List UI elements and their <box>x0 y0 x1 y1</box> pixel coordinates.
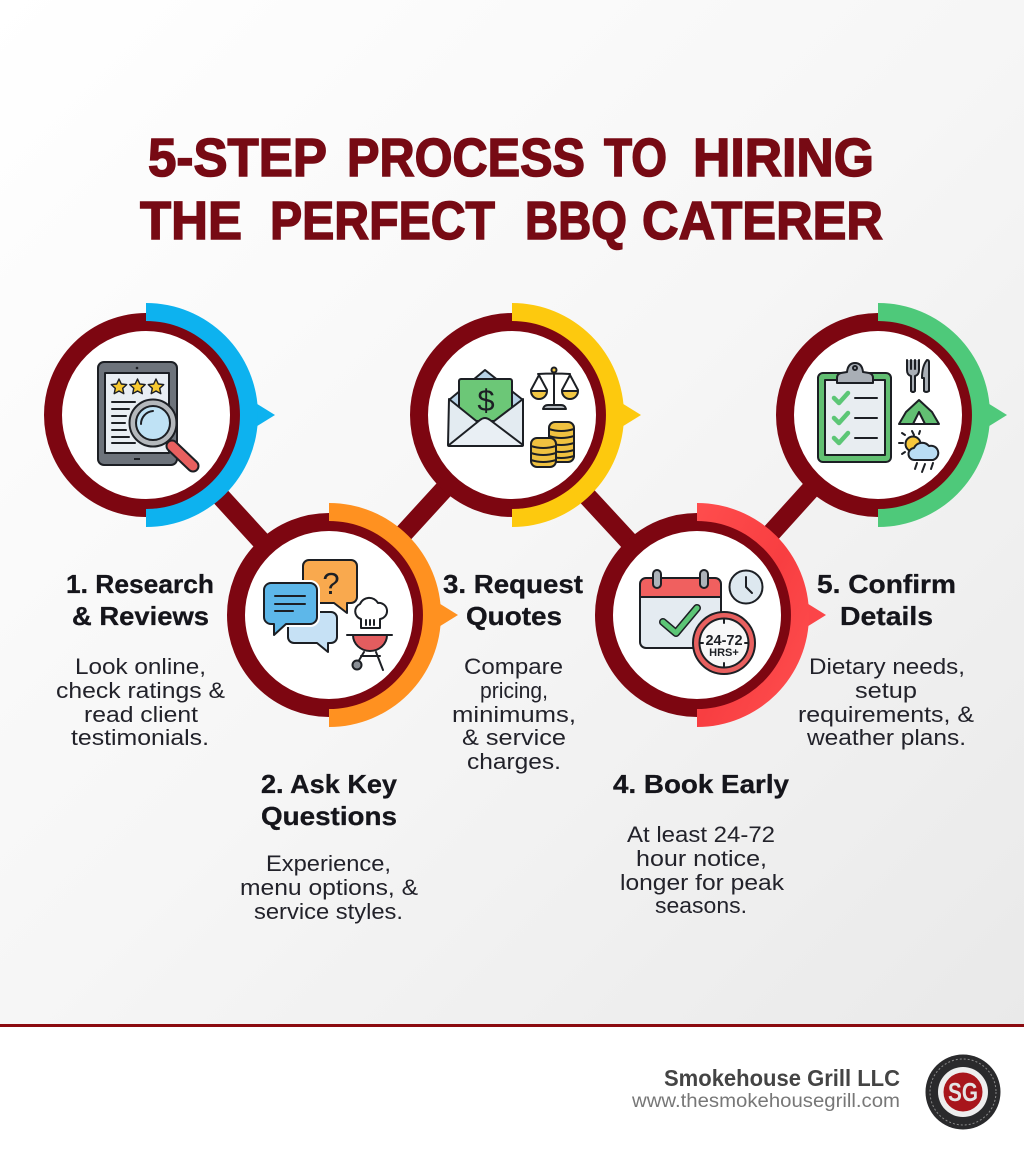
step 1 text <box>56 569 225 750</box>
step 1 ring <box>53 303 275 527</box>
step 3 text: Compare <box>464 654 563 679</box>
step 3 text: Quotes <box>466 601 562 631</box>
step 3 text: 3. Request <box>443 569 583 599</box>
step 4 text: 4. Book Early <box>613 769 790 799</box>
icon: clipboard, cutlery, tent and weather <box>818 360 939 472</box>
step 4 text: seasons. <box>655 893 747 918</box>
step 5 text: setup <box>855 678 917 703</box>
step 4 ring <box>604 503 826 727</box>
icon: calendar, clock and notice badge: 24-72 <box>705 633 743 649</box>
title: PERFECT <box>270 191 495 251</box>
title: 5-STEP <box>148 128 327 188</box>
icon: chat bubbles and grill: ? <box>322 566 340 601</box>
step 2 text <box>240 769 418 924</box>
step 3 text: pricing, <box>480 678 548 703</box>
step 2 text: service styles. <box>254 899 403 924</box>
icon: tablet with stars and magnifier <box>98 362 193 466</box>
step 2 text: Questions <box>261 801 397 831</box>
step 5 text: requirements, & <box>798 702 974 727</box>
icon: calendar, clock and notice badge: HRS+ <box>709 647 739 659</box>
title: TO <box>604 128 667 188</box>
title: PROCESS <box>347 128 585 188</box>
step 3 text: minimums, <box>452 702 576 727</box>
step 1 text: 1. Research <box>66 569 214 599</box>
step 5 text: 5. Confirm <box>817 569 956 599</box>
footer company name and website: www.thesmokehousegrill.com <box>631 1091 900 1112</box>
step 2 text: menu options, & <box>240 875 418 900</box>
footer company name and website <box>631 1065 900 1112</box>
icon: envelope, scales and coins <box>448 368 578 467</box>
footer logo: SG <box>948 1077 978 1107</box>
step 2 ring <box>236 503 458 727</box>
step 4 text: At least 24-72 <box>627 822 775 847</box>
icon: chat bubbles and grill <box>264 560 392 670</box>
footer band <box>0 1024 1024 1154</box>
step 2 text: 2. Ask Key <box>261 769 398 799</box>
step 5 text: weather plans. <box>806 725 966 750</box>
connectors between steps <box>146 415 878 615</box>
step 5 text: Dietary needs, <box>809 654 965 679</box>
step 3 text: charges. <box>467 749 561 774</box>
step 1 text: check ratings & <box>56 678 225 703</box>
title: HIRING <box>693 128 874 188</box>
step 2 text: Experience, <box>266 851 391 876</box>
step 3 ring <box>419 303 641 527</box>
step 3 text <box>443 569 583 774</box>
step 1 text: & Reviews <box>72 601 209 631</box>
step 4 text: hour notice, <box>636 846 767 871</box>
title: BBQ <box>525 191 627 251</box>
title <box>140 128 883 251</box>
step 5 text <box>798 569 974 750</box>
step 4 text <box>613 769 790 918</box>
footer logo <box>926 1054 1000 1130</box>
icon: envelope, scales and coins: $ <box>477 383 495 418</box>
step 5 text: Details <box>840 601 933 631</box>
icon: calendar, clock and notice badge <box>640 570 762 674</box>
title: THE <box>140 191 242 251</box>
step 1 text: testimonials. <box>71 725 209 750</box>
step 4 text: longer for peak <box>620 870 785 895</box>
step 1 text: Look online, <box>75 654 206 679</box>
step 1 text: read client <box>84 702 198 727</box>
footer company name and website: Smokehouse Grill LLC <box>664 1065 900 1091</box>
step 5 ring <box>785 303 1007 527</box>
step 3 text: & service <box>462 725 566 750</box>
title: CATERER <box>642 191 883 251</box>
